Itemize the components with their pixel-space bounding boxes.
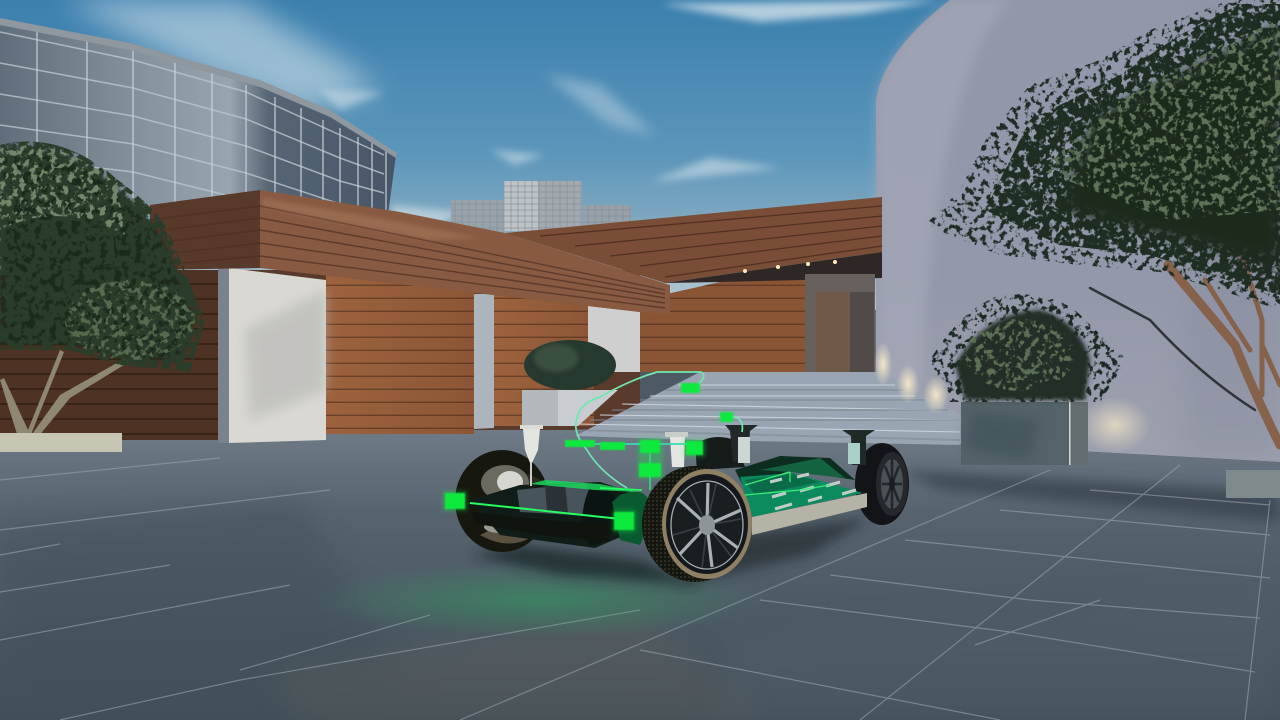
tree, right: [925, 0, 1280, 498]
green wiring: [470, 372, 830, 520]
battery tray: [740, 473, 867, 535]
glass building, left: [0, 18, 397, 215]
green glow halos: [443, 438, 705, 532]
wall lights: [874, 342, 1151, 453]
wood canopy, rear: [505, 197, 882, 283]
shock absorbers: [520, 425, 688, 486]
green modules: [445, 383, 733, 530]
rear left wheel: [455, 450, 552, 552]
sky: [0, 0, 1280, 310]
distant towers: [451, 181, 631, 233]
round white tower, right: [876, 0, 1280, 462]
car chassis: [443, 372, 909, 582]
rear motor and suspension: [695, 425, 875, 490]
wood fascia band: [150, 190, 670, 314]
steps: [575, 372, 960, 445]
planter with shrub, centre: [522, 340, 618, 426]
pavement: [0, 428, 1280, 720]
front motor drum: [470, 480, 652, 548]
planter with shrub, right: [930, 294, 1127, 465]
tree, left: [0, 142, 205, 452]
green floor glow: [310, 518, 870, 638]
entrance door: [805, 274, 875, 372]
front wheel: [642, 466, 752, 582]
rear right wheel: [855, 443, 909, 525]
wood pavilion, main: [0, 190, 805, 443]
